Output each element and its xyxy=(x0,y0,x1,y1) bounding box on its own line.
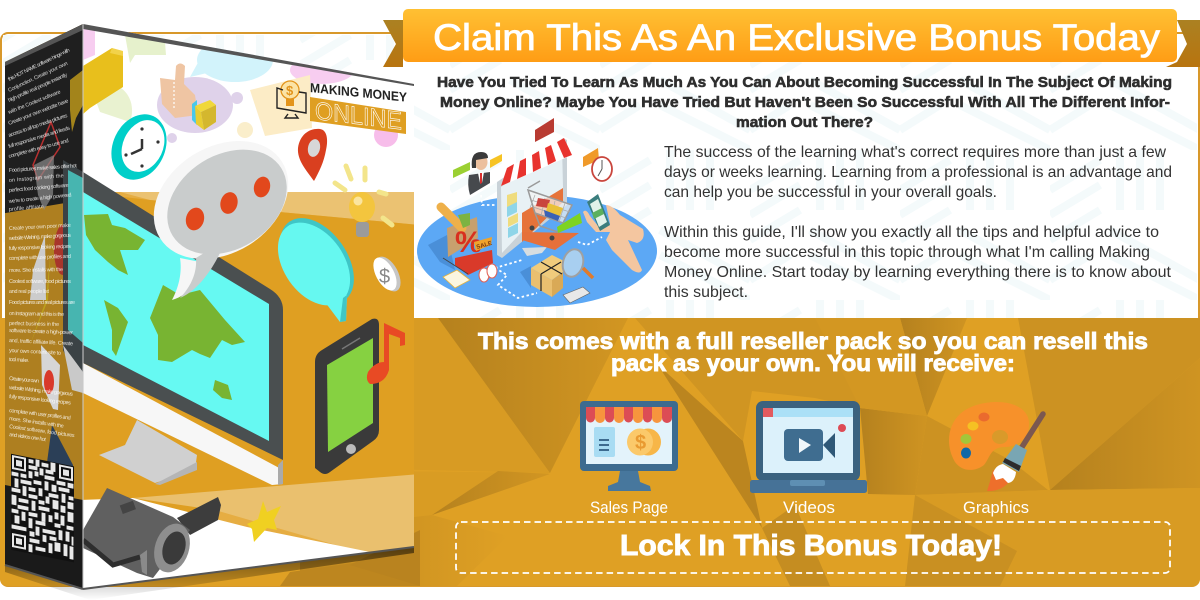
icon: videos laptop xyxy=(750,401,867,493)
star xyxy=(247,501,281,542)
side text: Coolest software, food pictures xyxy=(9,279,71,285)
panel: lower faceted orange background xyxy=(0,318,1200,586)
icon: credit card xyxy=(535,118,554,142)
heading: question text: mation Out There? xyxy=(736,114,873,131)
folder icon xyxy=(83,48,123,114)
QR code xyxy=(11,454,74,562)
text block: body copy xyxy=(664,144,1172,301)
icon: sales page monitor: $ xyxy=(635,432,646,454)
heading: reseller pack xyxy=(478,328,1148,376)
side text: and real people list xyxy=(9,289,50,295)
icon: percent gift: % xyxy=(455,226,482,259)
side text: and, traffic affiliate life. Create xyxy=(9,338,73,347)
icon: support tag xyxy=(453,162,470,178)
icon: shopping cart xyxy=(528,181,582,240)
heading: reseller pack: This comes with a full reseller pack so you can resell this xyxy=(478,328,1148,354)
side text: full responsive media and feeds xyxy=(8,125,71,150)
side text xyxy=(7,48,77,443)
side text: we're to create a high powered xyxy=(8,192,72,205)
light bulb icon xyxy=(335,166,392,237)
yellow cube xyxy=(192,100,216,130)
icon: sneakers and shirt xyxy=(443,258,497,288)
icon: awning xyxy=(501,138,572,186)
label: sales page: Sales Page xyxy=(590,498,668,517)
side text: profile affiliate xyxy=(9,204,44,213)
orange table xyxy=(115,192,414,546)
dollar coin icon xyxy=(373,256,401,292)
side text: Create your own xyxy=(9,376,39,385)
side text: complete with use profiles and xyxy=(9,254,71,262)
box shadow xyxy=(5,547,414,600)
ribbon: right fold xyxy=(1166,20,1200,67)
location pin icon xyxy=(298,129,327,181)
label: graphics: Graphics xyxy=(963,498,1029,517)
text block: body copy: this subject. xyxy=(664,284,748,301)
text block: body copy: can help you be successful in your overall goals. xyxy=(664,184,997,201)
box edge highlight xyxy=(82,24,84,589)
reflection shapes xyxy=(30,70,83,510)
icon: grocery bag xyxy=(441,207,478,257)
dollar coin icon: $ xyxy=(379,266,390,288)
monitor xyxy=(83,172,283,485)
title banner: Claim This As An Exclusive Bonus Today xyxy=(433,17,1161,58)
side text: software to create a high-power xyxy=(9,328,73,336)
box bottom edge xyxy=(5,547,414,589)
heading: question text: Have You Tried To Learn As Much As You Can About Becoming Successful In The Subject Of Making xyxy=(437,74,1172,91)
side text: perfect business in the xyxy=(9,321,59,328)
side text: website Wishing, make gorgeous xyxy=(8,233,71,242)
side text: more. She installs with the xyxy=(9,267,63,274)
illustration: online shop xyxy=(417,118,657,307)
logo: making money online: MAKING MONEY xyxy=(310,80,407,105)
video camera xyxy=(83,488,221,578)
side text: fully responsive looking recipes xyxy=(9,394,71,407)
icon: graphics palette and brush xyxy=(949,402,1043,491)
side text: this HOT NAME software hinge with xyxy=(7,48,71,83)
top edge stripe xyxy=(83,23,414,86)
text block: body copy: days or weeks learning. Learning from a professional is an advantage and xyxy=(664,164,1172,181)
icon: percent gift xyxy=(455,226,493,275)
icon: 24h clock xyxy=(583,148,612,181)
icon: sales page monitor xyxy=(580,401,678,491)
side text: tool make. xyxy=(9,357,29,364)
button: lock in bonus: Lock In This Bonus Today! xyxy=(620,530,1002,562)
side text: complete with easy to use and xyxy=(8,138,69,160)
side text: Food pictures and real pictures are xyxy=(9,300,75,306)
heading: question text: Money Online? Maybe You Have Tried But Haven't Been So Successful With All The Different Infor- xyxy=(440,94,1170,111)
icon: agent xyxy=(468,152,490,195)
smartphone with music note xyxy=(315,319,405,474)
icon: percent gift: SALE xyxy=(476,241,493,251)
side text: more. She installs with the xyxy=(9,416,64,430)
side text: Food pictures make sales offer hot xyxy=(9,163,77,174)
clock icon xyxy=(111,114,167,180)
side text: Coolest software, food pictures xyxy=(9,424,75,439)
side text: high-profile real people instantly xyxy=(7,72,69,104)
heading: reseller pack: pack as your own. You will receive: xyxy=(611,350,1015,376)
thumbs up icon xyxy=(160,64,198,118)
speech bubble with three dots xyxy=(154,141,288,300)
logo: making money online xyxy=(277,80,407,135)
title banner xyxy=(403,9,1177,62)
product box: left side xyxy=(5,24,83,588)
side text: complete with user profiles and xyxy=(9,408,71,422)
label: videos: Videos xyxy=(783,498,835,517)
side text: Conjunction. Create your own xyxy=(7,61,69,94)
text block: body copy: The success of the learning what's correct requires more than just a few xyxy=(664,144,1167,161)
heading: question text xyxy=(437,74,1172,131)
icon: hand and smartphone xyxy=(583,194,644,272)
teal speech bubble xyxy=(278,218,354,322)
icon: shopping cart platform xyxy=(522,232,579,250)
side text: your own content site to xyxy=(9,348,61,357)
icon: shop screen xyxy=(497,138,567,258)
text block: body copy: become more successful in this topic through what I'm calling Making xyxy=(664,244,1150,261)
side text: Create your own website have xyxy=(8,98,69,127)
text block: body copy: Money Online. Start today by learning everything there is to know about xyxy=(664,264,1172,281)
icon: parcel xyxy=(531,255,572,297)
ribbon: left fold xyxy=(383,20,403,67)
product box: front cover xyxy=(80,20,420,600)
side text: website Wishing, make gorgeous xyxy=(8,385,73,398)
side text: with the Coolest software xyxy=(7,89,62,116)
icon: chat tag xyxy=(490,154,502,168)
side text: perfect food cooking software xyxy=(9,183,69,194)
side text: and videos one hot xyxy=(9,432,47,443)
side text: Create your own poor make xyxy=(9,223,71,232)
side text: on Instagram and this is the xyxy=(9,311,64,318)
icon: bank card xyxy=(563,287,590,303)
button: lock in bonus xyxy=(456,522,1170,573)
pastel background icons xyxy=(83,25,398,147)
logo: making money online: ONLINE xyxy=(315,97,402,135)
side text: access to all top media pictures xyxy=(8,113,69,139)
icon: magnifier xyxy=(560,247,593,279)
side text: on Instagram with the xyxy=(9,173,64,184)
side text: fully responsive looking recipes xyxy=(9,244,71,252)
logo: making money online: $ xyxy=(286,83,294,98)
text block: body copy: Within this guide, I'll show you exactly all the tips and helpful advice to xyxy=(664,224,1159,241)
